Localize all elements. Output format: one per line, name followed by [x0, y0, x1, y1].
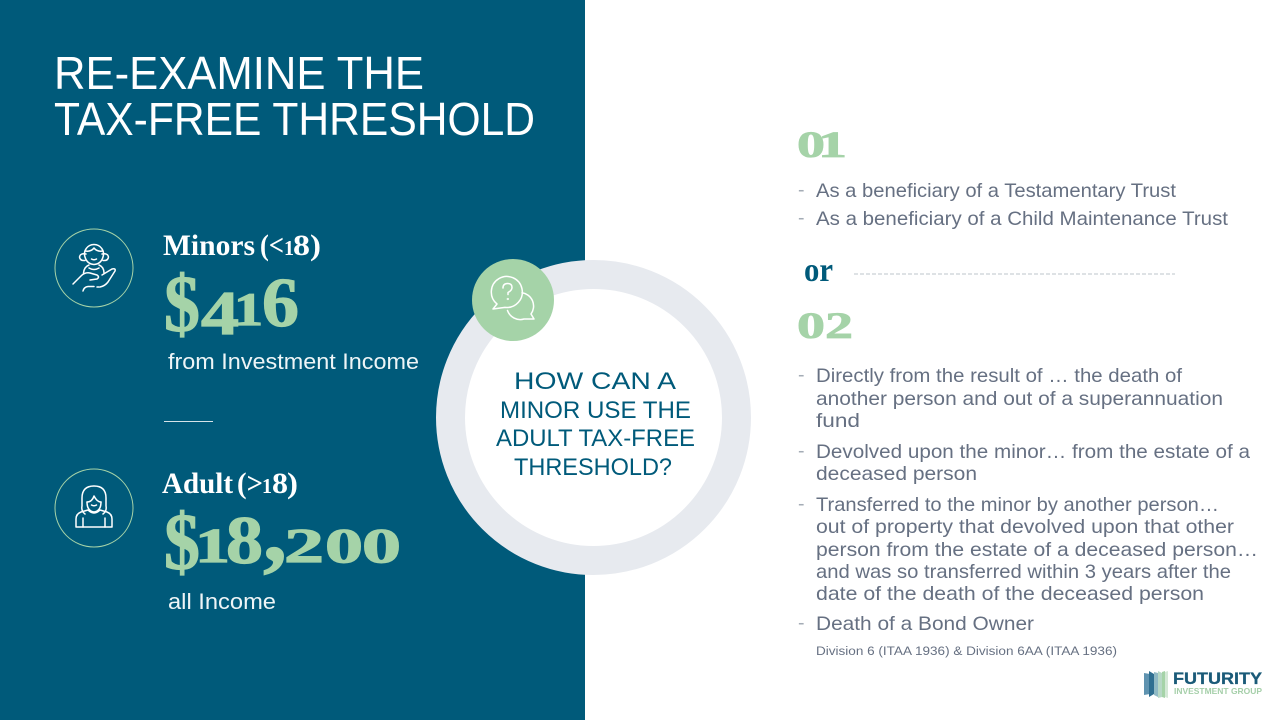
label: adult: 1	[262, 474, 272, 498]
figure: 18,200 dollars: 2	[284, 518, 324, 573]
list: option 02: -	[798, 493, 804, 515]
or separator: or	[804, 252, 833, 289]
source note: Division 6 (ITAA 1936) & Division 6AA (ITAA 1936)	[816, 646, 1117, 658]
list: option 01: -	[798, 207, 804, 229]
list: option 01: As a beneficiary of a Child Maintenance Trust	[816, 208, 1229, 230]
label: minors: 8	[293, 229, 310, 262]
label: minors: Minors	[163, 229, 255, 262]
figure: 416 dollars: 6	[262, 265, 299, 342]
list: option 01: As a beneficiary of a Testamentary Trust	[816, 180, 1177, 202]
number: 02	[797, 306, 853, 347]
logo: Futurity Investment Group	[1144, 669, 1263, 698]
number: 01	[797, 125, 847, 166]
list: option 02: fund	[816, 410, 860, 432]
icon: question speech bubbles	[472, 259, 554, 341]
figure: 416 dollars	[164, 261, 299, 349]
label: adult: (>	[237, 467, 263, 500]
list: option 02: Death of a Bond Owner	[816, 613, 1035, 635]
list: option 02: -	[798, 440, 804, 462]
caption: all income: all Income	[168, 589, 276, 614]
figure: 18,200 dollars: ,	[263, 482, 287, 581]
list: option 02: deceased person	[816, 463, 977, 485]
title: TAX-FREE THRESHOLD	[54, 93, 535, 145]
list: option 02: Directly from the result of … the death of	[816, 365, 1183, 387]
central question: MINOR USE THE	[500, 397, 691, 424]
figure: 416 dollars: 4	[201, 280, 239, 348]
central question: THRESHOLD?	[514, 454, 672, 481]
number: 01: 1	[818, 125, 847, 166]
figure: 18,200 dollars: $	[164, 499, 200, 587]
list: option 02: -	[798, 364, 804, 386]
label: adult: 8	[272, 467, 288, 500]
label: adult	[162, 467, 298, 500]
label: minors: )	[310, 229, 321, 262]
logo: Futurity Investment Group: FUTURITY	[1173, 669, 1263, 688]
list: option 02: another person and out of a superannuation	[816, 388, 1223, 410]
number: 02: 2	[825, 306, 853, 347]
central question	[496, 368, 695, 481]
figure: 18,200 dollars: 8	[226, 502, 263, 578]
list: option 02: person from the estate of a deceased person…	[816, 539, 1258, 561]
figure: 18,200 dollars: 0	[362, 518, 401, 573]
figure: 416 dollars: 1	[234, 284, 263, 336]
panel: left blue	[0, 0, 585, 720]
title: RE-EXAMINE THE	[54, 47, 424, 99]
label: minors: (<	[260, 229, 284, 262]
figure: 18,200 dollars	[164, 482, 401, 587]
icon: adult	[55, 469, 133, 547]
list: option 02: and was so transferred within 3 years after the	[816, 561, 1231, 583]
label: minors	[163, 229, 321, 262]
number: 01: 0	[797, 125, 825, 166]
list: option 02	[798, 364, 1258, 635]
title	[54, 47, 535, 145]
figure: 18,200 dollars: 0	[325, 518, 363, 573]
icon: minor in hand	[55, 229, 133, 307]
list: option 01	[798, 179, 1229, 230]
central ring	[450, 274, 736, 560]
list: option 01: -	[798, 179, 804, 201]
divider	[164, 421, 213, 422]
caption: from investment income: from Investment Income	[168, 349, 419, 374]
list: option 02: -	[798, 612, 804, 634]
figure: 18,200 dollars: 1	[195, 518, 230, 573]
number: 02: 0	[797, 306, 825, 347]
figure: 416 dollars: $	[164, 261, 200, 349]
list: option 02: date of the death of the deceased person	[816, 583, 1204, 605]
list: option 02: out of property that devolved upon that other	[816, 516, 1235, 538]
label: adult: )	[287, 467, 298, 500]
list: option 02: Transferred to the minor by another person…	[816, 494, 1219, 516]
logo: Futurity Investment Group: INVESTMENT GROUP	[1174, 686, 1262, 696]
label: minors: 1	[284, 236, 294, 260]
label: adult: Adult	[162, 467, 233, 500]
list: option 02: Devolved upon the minor… from the estate of a	[816, 441, 1250, 463]
central question: ADULT TAX-FREE	[496, 425, 695, 452]
central question: HOW CAN A	[514, 368, 676, 395]
